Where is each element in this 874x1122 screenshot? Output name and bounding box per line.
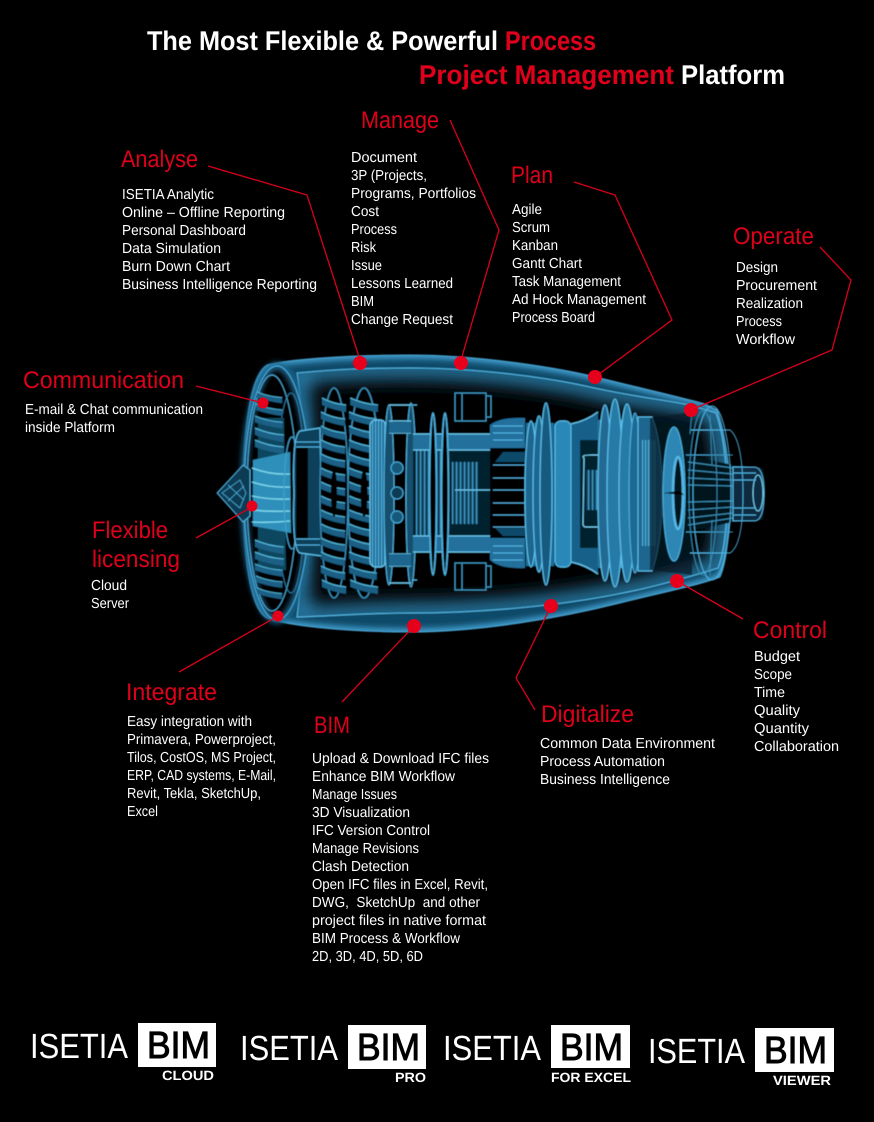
compressor stage 2 xyxy=(348,388,380,598)
list: operate xyxy=(736,260,817,348)
list: manage: 3P (Projects, xyxy=(351,168,427,184)
list: bim: Open IFC files in Excel, Revit, xyxy=(312,877,488,893)
list: flexible licensing: Server xyxy=(91,596,129,612)
list: plan: Ad Hock Management xyxy=(512,292,646,308)
list: control: Quantity xyxy=(754,721,810,737)
list: plan: Process Board xyxy=(512,310,595,326)
list: analyse: Data Simulation xyxy=(122,241,221,257)
text: communication xyxy=(25,402,203,436)
logo: isetia bim viewer: BIM xyxy=(764,1030,827,1072)
logo: isetia bim for excel: FOR EXCEL xyxy=(551,1070,631,1085)
list: manage xyxy=(351,150,476,328)
list: integrate: Easy integration with xyxy=(127,714,252,730)
heading: digitalize: Digitalize xyxy=(541,701,634,728)
list: bim: Manage Revisions xyxy=(312,841,419,857)
list: control: Scope xyxy=(754,667,792,683)
list: operate: Realization xyxy=(736,296,803,312)
list: flexible licensing: Cloud xyxy=(91,578,127,594)
accessory boxes xyxy=(455,393,491,590)
list: manage: BIM xyxy=(351,294,374,310)
list: plan: Task Management xyxy=(512,274,621,290)
list: bim: BIM Process & Workflow xyxy=(312,931,460,947)
combustor section xyxy=(490,418,525,568)
panel: control xyxy=(753,617,839,755)
list: manage: Issue xyxy=(351,258,382,274)
list: integrate: Revit, Tekla, SketchUp, xyxy=(127,786,261,802)
illustration: jet engine x-ray xyxy=(217,355,766,632)
hub cylinder xyxy=(294,428,322,556)
logo: isetia bim viewer xyxy=(648,1028,834,1088)
compressor stage 1 xyxy=(320,388,348,598)
list: analyse: Business Intelligence Reporting xyxy=(122,277,317,293)
list: integrate: Primavera, Powerproject, xyxy=(127,732,276,748)
logo: isetia bim cloud: CLOUD xyxy=(162,1068,214,1083)
list: integrate: ERP, CAD systems, E-Mail, xyxy=(127,768,276,784)
logo: isetia bim viewer: VIEWER xyxy=(773,1073,831,1088)
list: bim: DWG, SketchUp and other xyxy=(312,895,480,911)
leader lines xyxy=(179,120,851,710)
list: plan: Kanban xyxy=(512,238,558,254)
list: digitalize: Common Data Environment xyxy=(540,736,715,752)
list: manage: Risk xyxy=(351,240,377,256)
list: digitalize: Business Intelligence xyxy=(540,772,670,788)
logo: isetia bim pro xyxy=(240,1025,426,1085)
heading: analyse: Analyse xyxy=(121,146,198,173)
list: control xyxy=(754,649,839,755)
logo: isetia bim pro: ISETIA xyxy=(240,1029,339,1068)
text: communication: E-mail & Chat communication xyxy=(25,402,203,418)
exhaust cone xyxy=(686,455,766,532)
logo: isetia bim cloud: BIM xyxy=(147,1025,210,1067)
nacelle outer shell xyxy=(243,355,730,632)
rear ellipses xyxy=(689,406,743,580)
heading: control: Control xyxy=(753,617,827,644)
list: integrate: Tilos, CostOS, MS Project, xyxy=(127,750,276,766)
list: control: Budget xyxy=(754,649,800,665)
list: bim xyxy=(312,751,489,965)
heading: flexible licensing: licensing xyxy=(92,546,180,573)
list: plan: Gantt Chart xyxy=(512,256,582,272)
list: integrate xyxy=(127,714,276,820)
heading: integrate: Integrate xyxy=(126,679,217,706)
list: control: Time xyxy=(754,685,785,701)
text: communication: inside Platform xyxy=(25,420,115,436)
list: analyse: ISETIA Analytic xyxy=(122,187,214,203)
turbine large rings xyxy=(598,399,641,587)
turbine mid section xyxy=(553,412,607,574)
list: plan: Agile xyxy=(512,202,542,218)
panel: manage xyxy=(351,107,476,328)
list: analyse: Personal Dashboard xyxy=(122,223,246,239)
front core collar xyxy=(370,420,386,567)
list: operate: Workflow xyxy=(736,332,796,348)
panel: communication xyxy=(23,367,203,436)
panel: digitalize xyxy=(540,701,715,788)
exhaust disc xyxy=(663,427,685,561)
title xyxy=(147,26,785,90)
nose cone xyxy=(217,465,250,522)
list: bim: project files in native format xyxy=(312,913,486,929)
title: Process xyxy=(505,26,596,56)
list: manage: Cost xyxy=(351,204,379,220)
nacelle inner cavity xyxy=(297,368,727,617)
logo: isetia bim for excel xyxy=(443,1025,631,1085)
fan chamber xyxy=(244,366,310,620)
list: bim: Enhance BIM Workflow xyxy=(312,769,455,785)
list: bim: Upload & Download IFC files xyxy=(312,751,489,767)
list: bim: 2D, 3D, 4D, 5D, 6D xyxy=(312,949,423,965)
list: manage: Programs, Portfolios xyxy=(351,186,476,202)
panel: integrate xyxy=(126,679,276,820)
list: plan: Scrum xyxy=(512,220,550,236)
list: bim: Clash Detection xyxy=(312,859,409,875)
heading: flexible licensing: Flexible xyxy=(92,517,168,544)
list: digitalize: Process Automation xyxy=(540,754,665,770)
panel: analyse xyxy=(121,146,317,293)
panel: bim xyxy=(312,712,489,965)
list: integrate: Excel xyxy=(127,804,158,820)
heading: flexible licensing xyxy=(92,517,180,573)
list: operate: Design xyxy=(736,260,778,276)
turbine front rings xyxy=(525,403,554,585)
list: flexible licensing xyxy=(91,578,129,612)
heading: plan: Plan xyxy=(511,162,553,189)
list: bim: Manage Issues xyxy=(312,787,397,803)
list: manage: Document xyxy=(351,150,417,166)
list: analyse xyxy=(122,187,317,293)
logo: isetia bim viewer: ISETIA xyxy=(648,1032,746,1071)
heading: operate: Operate xyxy=(733,223,814,250)
list: plan xyxy=(512,202,646,326)
fan blades xyxy=(252,392,300,599)
logo: isetia bim pro: BIM xyxy=(357,1027,420,1069)
list: manage: Process xyxy=(351,222,397,238)
list: control: Quality xyxy=(754,703,801,719)
list: manage: Change Request xyxy=(351,312,453,328)
panel: operate xyxy=(733,223,817,348)
heading: communication: Communication xyxy=(23,367,184,394)
flange ring with ports xyxy=(384,403,417,587)
list: operate: Procurement xyxy=(736,278,817,294)
list: operate: Process xyxy=(736,314,782,330)
rear turbine casing xyxy=(638,412,692,575)
list: bim: IFC Version Control xyxy=(312,823,430,839)
list: manage: Lessons Learned xyxy=(351,276,453,292)
list: analyse: Burn Down Chart xyxy=(122,259,230,275)
panel: flexible licensing xyxy=(91,517,180,612)
logo: isetia bim cloud xyxy=(30,1023,216,1083)
callout dots xyxy=(246,356,698,633)
list: digitalize xyxy=(540,736,715,788)
list: analyse: Online – Offline Reporting xyxy=(122,205,285,221)
list: bim: 3D Visualization xyxy=(312,805,410,821)
heading: bim: BIM xyxy=(314,712,350,739)
list: control: Collaboration xyxy=(754,739,839,755)
logo: isetia bim pro: PRO xyxy=(395,1070,426,1085)
title: Platform xyxy=(681,60,785,90)
panel: plan xyxy=(511,162,646,326)
title: The Most Flexible & Powerful xyxy=(147,26,498,56)
core drum xyxy=(413,413,493,575)
heading: manage: Manage xyxy=(361,107,439,134)
logo: isetia bim cloud: ISETIA xyxy=(30,1027,129,1066)
logo: isetia bim for excel: ISETIA xyxy=(443,1029,542,1068)
logo: isetia bim for excel: BIM xyxy=(560,1027,623,1069)
title: Project Management xyxy=(419,60,674,90)
